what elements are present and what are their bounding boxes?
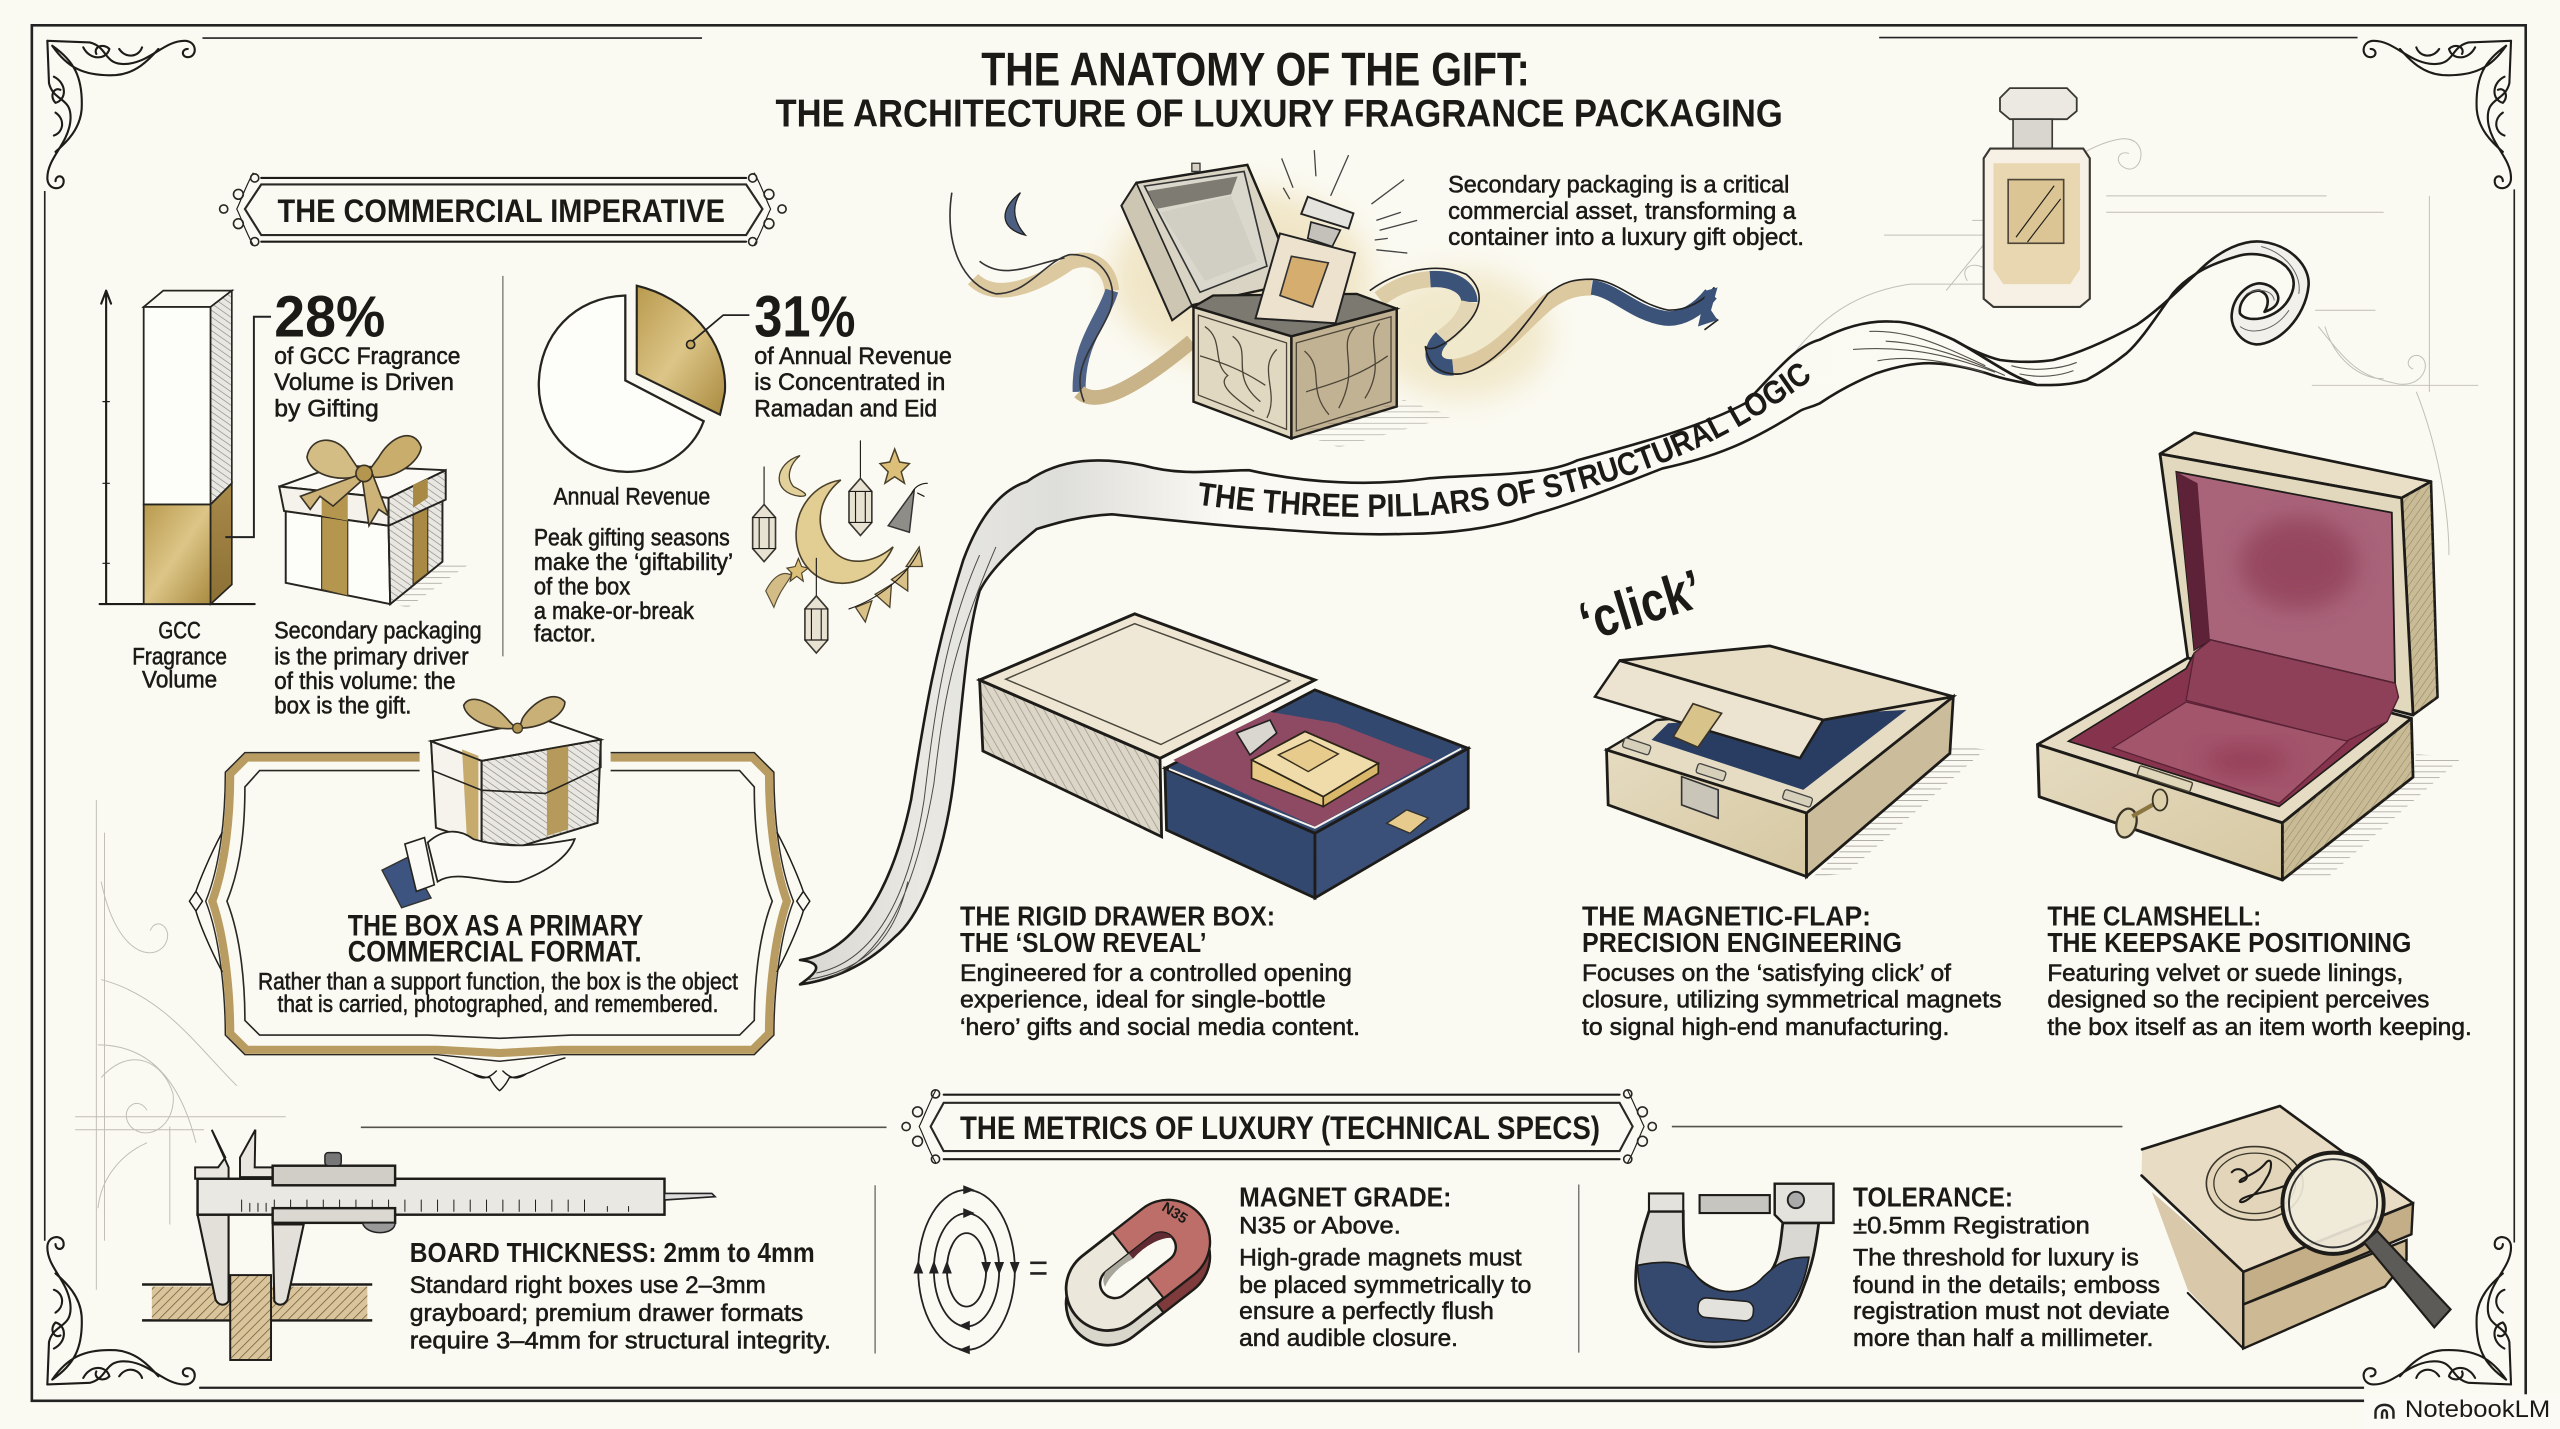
heading banner: the commercial imperative bbox=[220, 173, 786, 246]
caption: the magnetic-flap: PRECISION ENGINEERING bbox=[1582, 927, 1902, 958]
caption: the clamshell: THE KEEPSAKE POSITIONING bbox=[2047, 927, 2411, 958]
caption: the rigid drawer box: THE RIGID DRAWER BOX: bbox=[960, 901, 1275, 932]
text: secondary packaging is a critical asset: Secondary packaging is a critical bbox=[1448, 172, 1789, 199]
callout: the box as a primary commercial format: Rather than a support function, the box is the object bbox=[258, 968, 738, 995]
heading banner: the commercial imperative: THE COMMERCIAL IMPERATIVE bbox=[278, 192, 725, 229]
text: peak gifting seasons: of the box bbox=[534, 573, 630, 600]
stat: 28 percent of volume: Volume is Driven bbox=[274, 369, 454, 396]
caption: the clamshell: the box itself as an item worth keeping. bbox=[2047, 1014, 2472, 1041]
text: tolerance: ±0.5mm Registration bbox=[1853, 1212, 2090, 1239]
caption: the magnetic-flap bbox=[1582, 901, 2002, 1041]
hero illustration: opened box with bottle and ribbons bbox=[950, 150, 1718, 447]
text: magnet grade: ensure a perfectly flush bbox=[1239, 1298, 1494, 1325]
title bbox=[776, 44, 1783, 136]
text: magnet grade: N35 or Above. bbox=[1239, 1212, 1401, 1239]
divider bbox=[502, 276, 504, 656]
text: tolerance: registration must not deviate bbox=[1853, 1298, 2170, 1325]
label: GCC fragrance volume: Volume bbox=[142, 666, 217, 693]
corner ornament: top left bbox=[47, 41, 195, 188]
label: GCC fragrance volume: Fragrance bbox=[132, 643, 227, 670]
text: secondary packaging driver: box is the gift. bbox=[274, 692, 411, 719]
stat: 31 percent of revenue bbox=[754, 284, 952, 422]
text: magnet grade: MAGNET GRADE: bbox=[1239, 1182, 1451, 1213]
caption: the magnetic-flap: to signal high-end manufacturing. bbox=[1582, 1014, 1949, 1041]
text: magnet grade: and audible closure. bbox=[1239, 1325, 1458, 1352]
caption: the clamshell: Featuring velvet or suede linings, bbox=[2047, 960, 2403, 987]
caption: the rigid drawer box: Engineered for a controlled opening bbox=[960, 960, 1352, 987]
text: magnet grade: be placed symmetrically to bbox=[1239, 1272, 1531, 1299]
text: secondary packaging driver: Secondary packaging bbox=[274, 617, 482, 644]
text: peak gifting seasons: make the ‘giftability’ bbox=[534, 549, 733, 576]
pie chart: annual revenue bbox=[539, 286, 749, 472]
stat: 31 percent of revenue: of Annual Revenue bbox=[754, 343, 952, 370]
faint construction sketches bbox=[75, 139, 2478, 1290]
text: secondary packaging is a critical asset: commercial asset, transforming a bbox=[1448, 198, 1796, 225]
text: tolerance: The threshold for luxury is bbox=[1853, 1244, 2139, 1271]
heading banner: the metrics of luxury bbox=[361, 1090, 2122, 1163]
text: peak gifting seasons: factor. bbox=[534, 621, 596, 648]
caption: the rigid drawer box bbox=[960, 901, 1360, 1041]
text: secondary packaging driver bbox=[274, 617, 482, 719]
text: tolerance: more than half a millimeter. bbox=[1853, 1325, 2153, 1352]
corner ornament: bottom left bbox=[47, 1237, 195, 1384]
illustration: rigid drawer box bbox=[980, 614, 1468, 898]
caption: the clamshell: designed so the recipient perceives bbox=[2047, 986, 2429, 1013]
badge: NotebookLM: NotebookLM bbox=[2405, 1396, 2550, 1423]
icon: Ramadan and Eid decorations bbox=[753, 441, 927, 653]
label: GCC fragrance volume bbox=[132, 617, 227, 693]
text: board thickness: require 3–4mm for structural integrity. bbox=[410, 1328, 831, 1355]
text: secondary packaging is a critical asset bbox=[1448, 172, 1804, 251]
stat: 28 percent of volume bbox=[274, 284, 460, 422]
icon: embossed box with magnifying glass bbox=[2142, 1106, 2451, 1349]
callout: the box as a primary commercial format: THE BOX AS A PRIMARY bbox=[348, 910, 644, 943]
callout: the box as a primary commercial format bbox=[189, 697, 810, 1091]
text: board thickness bbox=[410, 1237, 831, 1355]
stat: 31 percent of revenue: Ramadan and Eid bbox=[754, 395, 937, 422]
illustration: clamshell box bbox=[2038, 433, 2462, 880]
title: THE ARCHITECTURE OF LUXURY FRAGRANCE PACKAGING bbox=[776, 93, 1783, 136]
caption: the rigid drawer box: ‘hero’ gifts and social media content. bbox=[960, 1014, 1360, 1041]
stat: 31 percent of revenue: is Concentrated in bbox=[754, 369, 945, 396]
divider bbox=[1578, 1184, 1580, 1353]
text: board thickness: Standard right boxes use 2–3mm bbox=[410, 1272, 766, 1299]
stat: 31 percent of revenue: 31% bbox=[754, 284, 856, 349]
main ribbon: three pillars of structural logic: THE THREE PILLARS OF STRUCTURAL LOGIC bbox=[1199, 364, 1810, 517]
illustration: magnetic-flap box bbox=[1595, 646, 1985, 877]
text: board thickness: grayboard; premium drawer formats bbox=[410, 1300, 803, 1327]
text: secondary packaging driver: of this volume: the bbox=[274, 668, 456, 695]
text: tolerance: TOLERANCE: bbox=[1853, 1182, 2013, 1213]
corner ornament: top right bbox=[2364, 41, 2511, 188]
icon: gift box bbox=[279, 436, 470, 607]
caption: the rigid drawer box: THE ‘SLOW REVEAL’ bbox=[960, 927, 1207, 958]
text: tolerance: found in the details; emboss bbox=[1853, 1272, 2160, 1299]
text: magnet grade: High-grade magnets must bbox=[1239, 1244, 1522, 1271]
text: peak gifting seasons bbox=[534, 524, 733, 648]
stat: 28 percent of volume: of GCC Fragrance bbox=[274, 343, 460, 370]
badge: NotebookLM bbox=[2364, 1394, 2560, 1429]
text: board thickness: BOARD THICKNESS: 2mm to 4mm bbox=[410, 1237, 815, 1268]
divider bbox=[874, 1185, 876, 1353]
stat: 28 percent of volume: by Gifting bbox=[274, 395, 379, 422]
icon: magnetic field rings and magnet bbox=[913, 1183, 1227, 1362]
label: annual revenue: Annual Revenue bbox=[553, 483, 710, 510]
text: secondary packaging is a critical asset: container into a luxury gift object. bbox=[1448, 224, 1804, 251]
label: click sound: ‘click’ bbox=[1572, 558, 1709, 653]
text: tolerance bbox=[1853, 1182, 2170, 1352]
icon: micrometer bbox=[1636, 1184, 1833, 1347]
text: secondary packaging driver: is the primary driver bbox=[274, 643, 469, 670]
main ribbon: three pillars of structural logic bbox=[798, 240, 2310, 986]
illustration: perfume bottle bbox=[1984, 88, 2090, 307]
caption: the magnetic-flap: THE MAGNETIC-FLAP: bbox=[1582, 901, 1871, 932]
callout: the box as a primary commercial format: that is carried, photographed, and remembered. bbox=[278, 991, 718, 1018]
caption: the magnetic-flap: Focuses on the ‘satisfying click’ of bbox=[1582, 960, 1951, 987]
label: GCC fragrance volume: GCC bbox=[158, 617, 201, 644]
text: peak gifting seasons: a make-or-break bbox=[534, 598, 695, 625]
caption: the magnetic-flap: closure, utilizing symmetrical magnets bbox=[1582, 986, 2002, 1013]
corner ornament: bottom right bbox=[2364, 1237, 2511, 1384]
title: THE ANATOMY OF THE GIFT: bbox=[981, 44, 1530, 97]
icon: magnetic field rings and magnet: N35 bbox=[1159, 1200, 1190, 1227]
caption: the clamshell bbox=[2047, 901, 2472, 1041]
text: magnet grade bbox=[1239, 1182, 1531, 1352]
stat: 28 percent of volume: 28% bbox=[274, 284, 385, 349]
caption: the rigid drawer box: experience, ideal for single-bottle bbox=[960, 986, 1326, 1013]
heading banner: the metrics of luxury: THE METRICS OF LUXURY (TECHNICAL SPECS) bbox=[960, 1109, 1600, 1146]
text: peak gifting seasons: Peak gifting seasons bbox=[534, 524, 730, 551]
callout: the box as a primary commercial format: COMMERCIAL FORMAT. bbox=[348, 936, 642, 969]
caption: the clamshell: THE CLAMSHELL: bbox=[2047, 901, 2261, 932]
illustration: caliper measuring board bbox=[142, 1130, 715, 1360]
bar chart: GCC fragrance volume bbox=[100, 291, 271, 604]
